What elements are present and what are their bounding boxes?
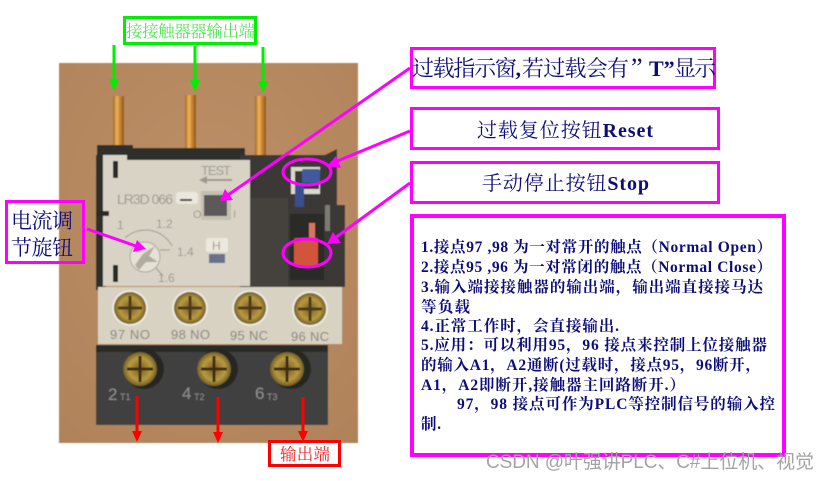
output terminal labels: 6 xyxy=(255,384,264,403)
watermark: CSDN @叶强讲PLC、C#上位机、视觉 xyxy=(486,451,814,473)
arrow: to stop button xyxy=(327,183,410,244)
arrow: to reset button xyxy=(327,131,410,168)
indicator window: O xyxy=(193,209,202,221)
label text: 显示 xyxy=(674,56,717,81)
heading: contactor input: 接接触器器输出端 xyxy=(126,22,256,41)
label: stop button: 手动停止按钮Stop xyxy=(482,172,649,195)
grey front panel xyxy=(103,155,250,286)
arrow: to current dial xyxy=(87,229,146,252)
auxiliary contact labels: 96 NC xyxy=(291,329,329,344)
label text: 若过载会有 xyxy=(522,56,629,81)
label text: ” xyxy=(631,53,643,82)
indicator window xyxy=(193,191,236,221)
label: current dial: 节旋钮 xyxy=(11,236,73,260)
green arrow left xyxy=(109,45,119,91)
input pins xyxy=(113,95,266,158)
test slider xyxy=(176,192,198,204)
notes text: 2.接点95 ,96 为一对常闭的触点（Normal Close） xyxy=(421,257,772,276)
label text: 过载指示窗, xyxy=(412,56,521,81)
current dial: 1.4 xyxy=(177,245,194,259)
panel slots xyxy=(96,161,118,282)
auxiliary contact labels: 98 NO xyxy=(171,327,210,342)
test label: TEST xyxy=(201,163,231,178)
H button: H xyxy=(212,239,221,253)
label text: T” xyxy=(649,56,675,81)
indicator window: I xyxy=(233,209,236,221)
current dial xyxy=(117,217,194,285)
highlight: stop button xyxy=(283,239,331,267)
output screws xyxy=(123,349,311,389)
label: output xyxy=(270,442,340,466)
auxiliary screws xyxy=(112,290,328,327)
current dial: 1.6 xyxy=(158,271,175,285)
notes text: A1，A2即断开,接触器主回路断开.） xyxy=(421,375,685,395)
current dial: 1 xyxy=(117,218,124,232)
label: current dial: 电流调 xyxy=(11,209,73,233)
auxiliary contact band xyxy=(98,287,342,344)
label: overload window xyxy=(412,48,717,88)
model label: LR3D 066 xyxy=(117,191,173,207)
red arrow middle xyxy=(213,397,223,443)
notes text: 97，98 接点可作为PLC等控制信号的输入控 xyxy=(457,394,775,414)
current dial: 1.2 xyxy=(156,217,173,231)
label: reset button xyxy=(412,108,718,148)
output terminal labels xyxy=(108,384,278,404)
notes text: 1.接点97 ,98 为一对常开的触点（Normal Open） xyxy=(421,237,772,256)
auxiliary contact labels: 97 NO xyxy=(110,327,150,342)
red arrow left xyxy=(132,396,142,442)
green arrow right xyxy=(258,47,268,93)
auxiliary contact labels xyxy=(110,327,329,344)
lower terminal block xyxy=(96,345,328,425)
output terminal labels: T3 xyxy=(267,392,278,402)
label: current dial xyxy=(6,202,84,262)
notes text: 等负载 xyxy=(421,297,470,316)
stop button xyxy=(290,205,330,280)
notes text: 制. xyxy=(421,414,441,433)
notes text: 4.正常工作时，会直接输出. xyxy=(421,316,619,336)
arrow: to overload window xyxy=(220,68,410,201)
relay dark housing xyxy=(96,145,345,290)
notes text: 的输入A1，A2通断(过载时，接点95，96断开， xyxy=(421,355,761,375)
label: output: 输出端 xyxy=(280,445,330,464)
reset button xyxy=(291,167,320,207)
notes text: 3.输入端接接触器的输出端，输出端直接接马达 xyxy=(421,277,764,297)
terminal block top shadow xyxy=(96,345,328,352)
output terminal labels: T2 xyxy=(194,392,205,402)
label: stop button xyxy=(412,162,718,202)
green arrow middle xyxy=(190,46,200,92)
notes text xyxy=(421,237,775,433)
H button xyxy=(206,238,228,263)
output terminal labels: T1 xyxy=(120,392,131,402)
label text xyxy=(412,53,717,82)
photo background xyxy=(59,63,358,443)
output terminal labels: 4 xyxy=(182,384,191,403)
label: reset button: 过载复位按钮Reset xyxy=(477,119,653,142)
highlight: reset button xyxy=(283,159,331,185)
red arrow right xyxy=(298,397,308,442)
test arrow xyxy=(199,176,232,184)
photo: thermal overload relay xyxy=(59,63,358,443)
auxiliary contact labels: 95 NC xyxy=(230,328,268,343)
panel: notes xyxy=(412,216,784,455)
output terminal labels: 2 xyxy=(108,385,117,404)
notes text: 5.应用：可以利用95，96 接点来控制上位接触器 xyxy=(421,335,767,355)
